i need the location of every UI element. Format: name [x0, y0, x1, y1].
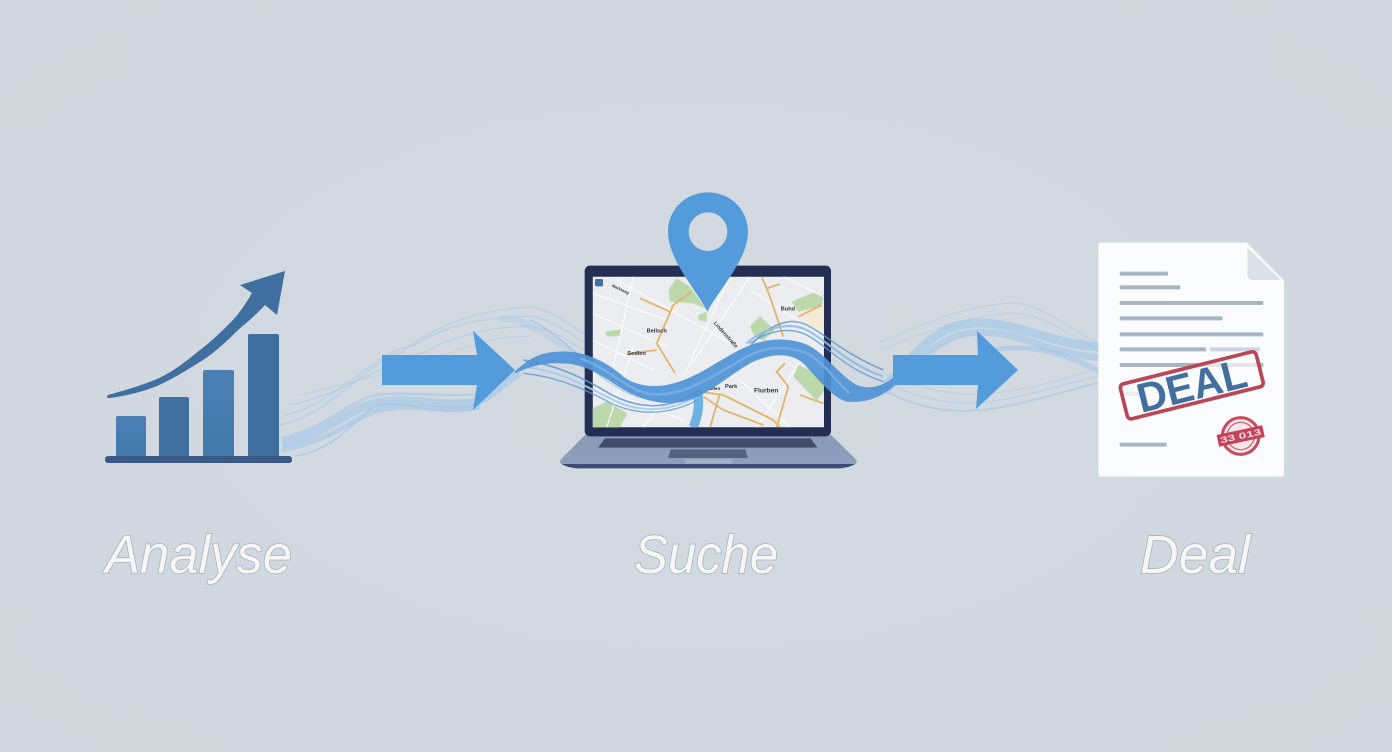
icon: contract document	[1098, 243, 1284, 477]
chart baseline	[105, 456, 292, 463]
icon: bar chart with rising arrow	[105, 271, 292, 463]
laptop base	[560, 435, 857, 468]
map on screen: Sedlen	[627, 351, 646, 357]
map on screen: Bellsch	[647, 329, 667, 335]
document text lines	[1120, 272, 1263, 447]
label: Deal: Deal	[1140, 525, 1252, 585]
infographic: Analyse to Suche to Deal process	[101, 192, 1284, 585]
map on screen: Flurben	[754, 387, 778, 394]
label: Suche: Suche	[634, 525, 778, 585]
rising arrow	[107, 271, 285, 398]
small round seal: 33 013	[1219, 427, 1262, 445]
small round seal	[1214, 413, 1267, 459]
DEAL stamp: DEAL	[1132, 350, 1252, 422]
document sheet	[1098, 243, 1284, 477]
thick ribbon	[515, 340, 897, 403]
map on screen: Buhd	[781, 307, 796, 313]
background flow lines left	[280, 307, 600, 456]
icon: map location pin	[668, 192, 748, 312]
map on screen: Lindenstraße	[712, 321, 739, 350]
background flow lines right	[880, 303, 1100, 411]
map on screen	[593, 277, 824, 427]
arrow: Analyse to Suche	[382, 331, 515, 410]
label: Analyse: Analyse	[102, 525, 292, 585]
laptop screen frame	[585, 266, 831, 436]
arrow: Suche to Deal	[893, 331, 1018, 409]
chart bars	[116, 334, 279, 458]
page fold	[1247, 247, 1281, 280]
icon: laptop with map	[560, 266, 857, 468]
map on screen: Marktweg	[611, 283, 631, 296]
map on screen: Laden	[707, 386, 721, 391]
main flow wave	[515, 320, 897, 412]
map on screen: Park	[725, 384, 738, 390]
